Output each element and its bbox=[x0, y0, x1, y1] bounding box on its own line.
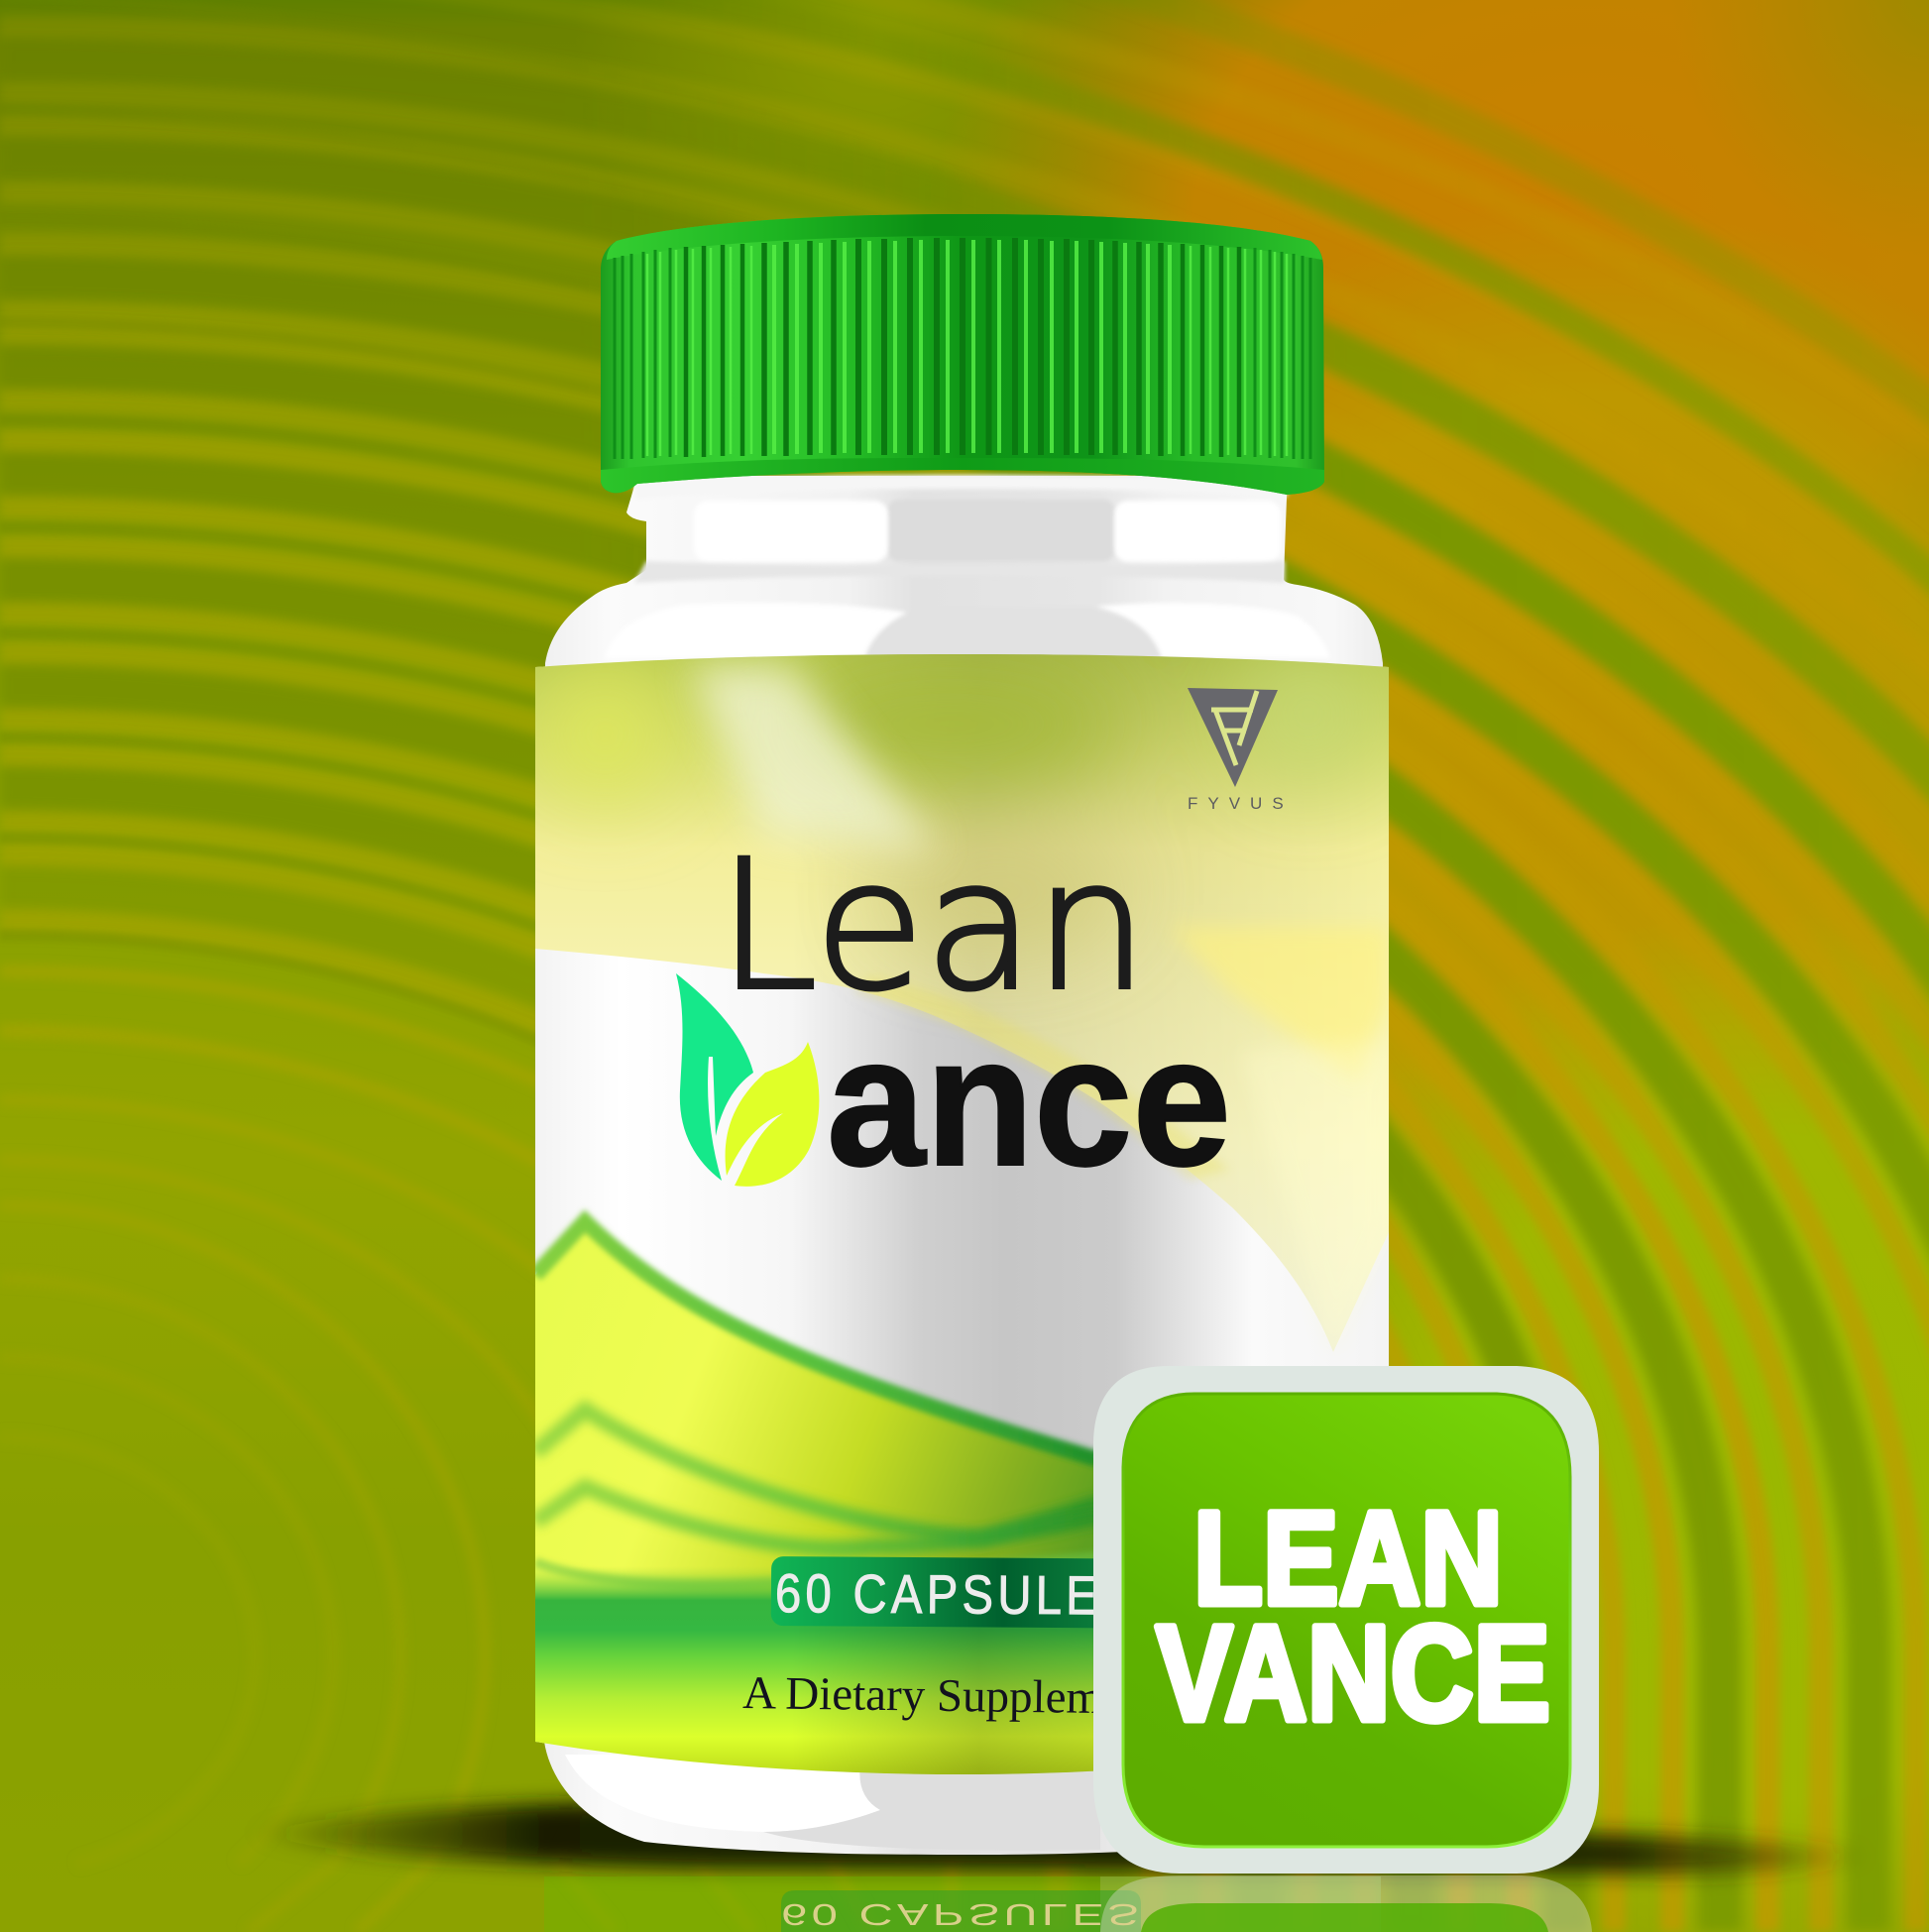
capsule count tag bbox=[771, 1556, 1093, 1628]
reflected badge bbox=[1100, 1875, 1592, 1932]
floor shadow bbox=[238, 1801, 1883, 1875]
badge: LEAN VANCE bbox=[1093, 1366, 1599, 1874]
reflected capsule tag bbox=[781, 1890, 1141, 1932]
label bbox=[535, 644, 1389, 1784]
badge green panel bbox=[1123, 1394, 1570, 1847]
badge wordmark bbox=[1156, 1485, 1550, 1750]
neck highlights bbox=[634, 475, 1289, 583]
cap shell bbox=[601, 214, 1324, 495]
brand logo: FYVUS: FYVUS bbox=[1188, 794, 1294, 813]
cap top rim bbox=[607, 214, 1322, 260]
reflection on the floor bbox=[544, 1875, 1592, 1932]
label white base bbox=[535, 649, 1389, 1779]
cap lower lip bbox=[601, 458, 1324, 495]
lower green swoosh bbox=[535, 1206, 1093, 1774]
bottle body bbox=[544, 476, 1384, 1855]
brand logo: FYVUS bbox=[1188, 688, 1294, 813]
reflected capsule text: 60 CAPSULES bbox=[781, 1897, 1143, 1931]
product name: ance: ance bbox=[827, 999, 1231, 1204]
supplement line: A Dietary Supplement bbox=[742, 1667, 1160, 1725]
badge frame bbox=[1093, 1366, 1599, 1874]
capsule count tag: 60 CAPSULES bbox=[775, 1562, 1137, 1627]
cap ribs bbox=[615, 238, 1310, 459]
shoulder highlights bbox=[605, 603, 1330, 658]
label yellow wash bbox=[535, 644, 1389, 1352]
product name: Lean: Lean bbox=[718, 823, 1148, 1030]
bottle bbox=[535, 214, 1389, 1855]
reflected bottle bbox=[544, 1876, 1381, 1932]
cap bbox=[601, 214, 1324, 495]
icon: leaves bbox=[676, 973, 819, 1187]
badge wordmark: VANCE bbox=[1156, 1598, 1550, 1750]
cap rib highlights bbox=[647, 240, 1287, 456]
badge wordmark: LEAN bbox=[1193, 1485, 1503, 1633]
bottom highlight bbox=[565, 1755, 1100, 1851]
